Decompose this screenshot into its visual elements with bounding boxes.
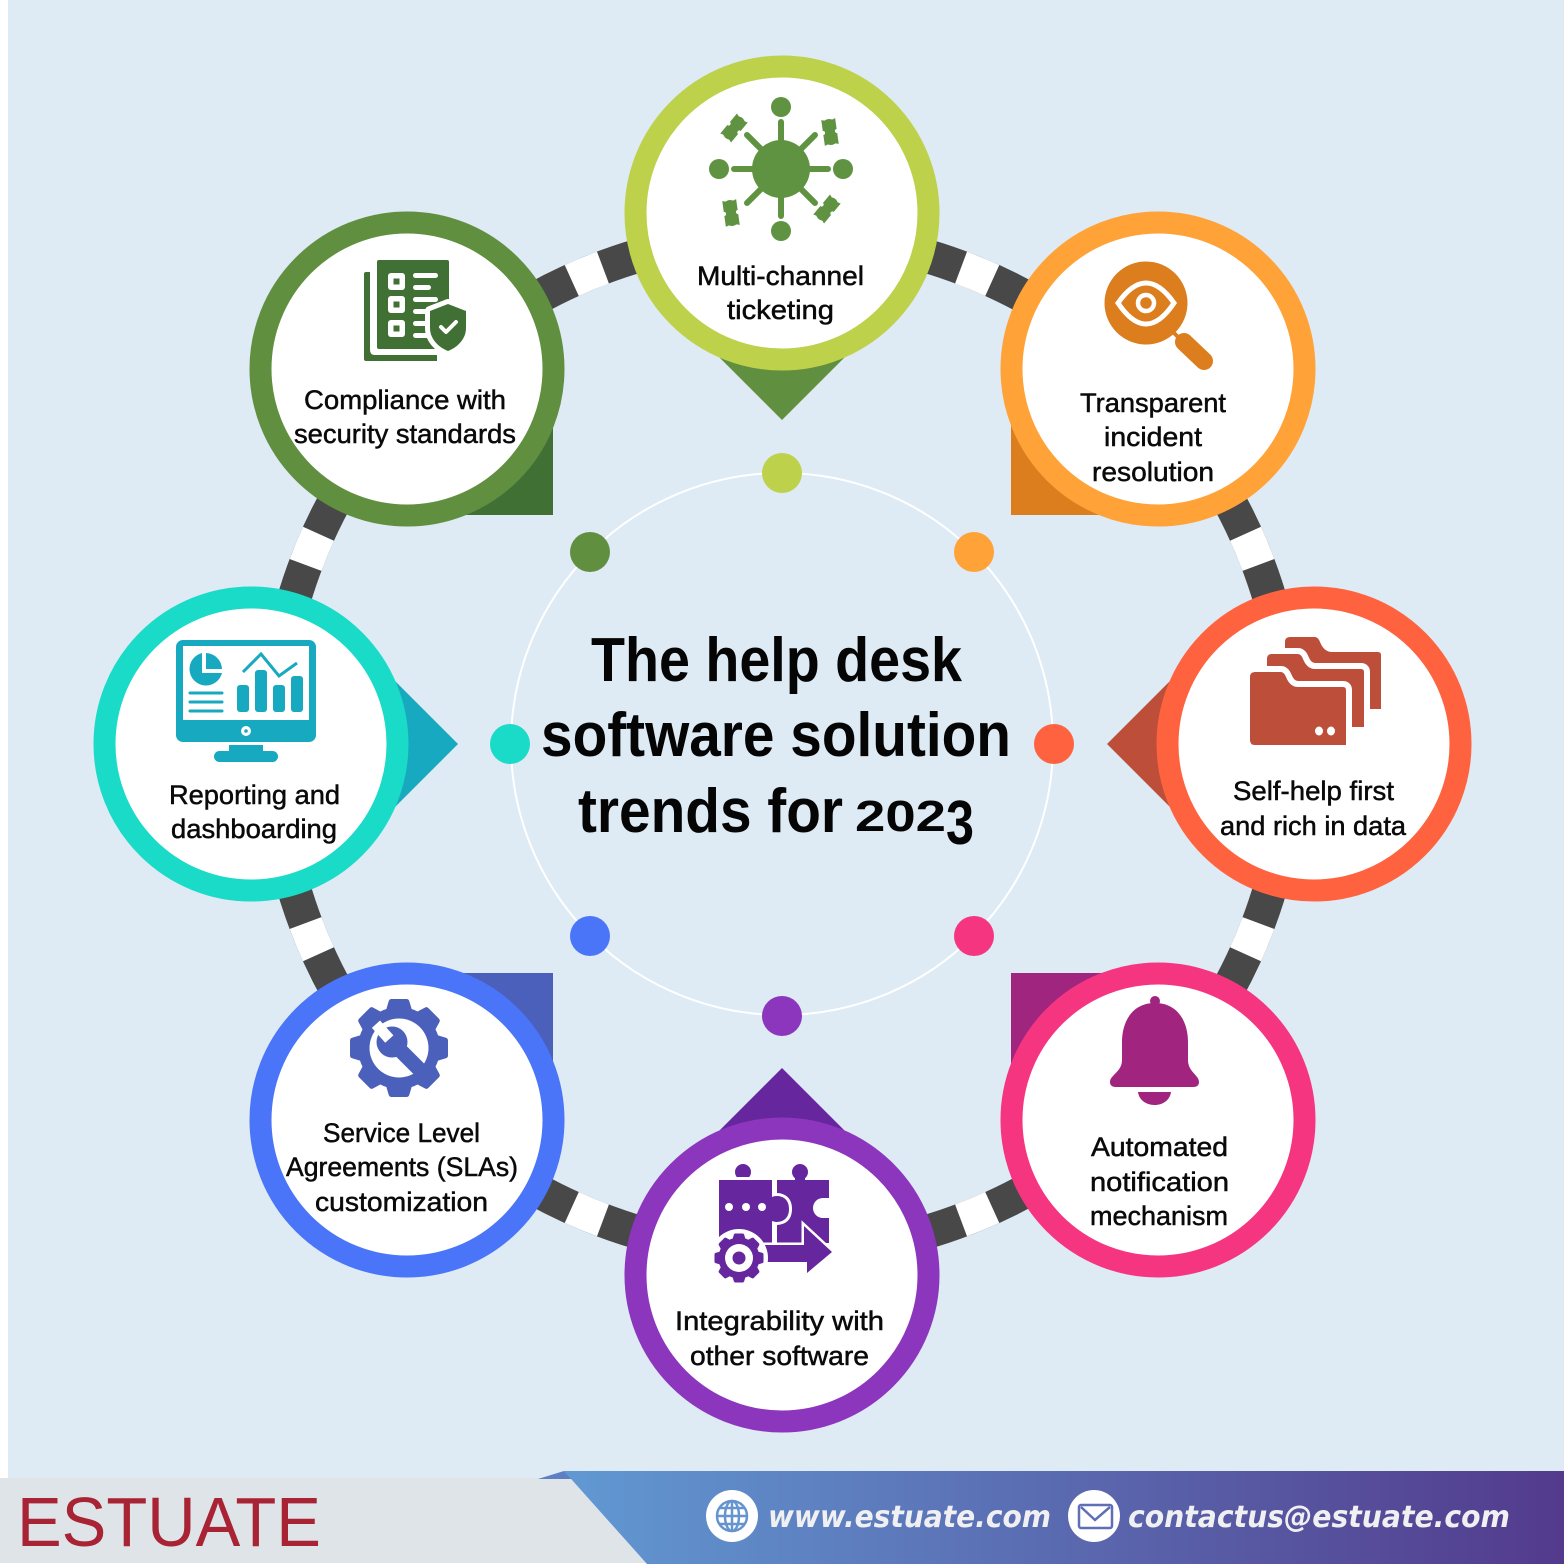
label: Service Level xyxy=(323,1118,480,1148)
panel: compliance with security standards xyxy=(260,222,554,516)
label xyxy=(1080,388,1226,487)
label xyxy=(169,780,340,844)
icon: bell xyxy=(1110,996,1199,1105)
title: 202 xyxy=(855,792,946,841)
title: trends for xyxy=(578,777,843,846)
label xyxy=(294,385,516,449)
label: mechanism xyxy=(1090,1201,1228,1231)
label: notification xyxy=(1090,1167,1229,1197)
label: Transparent xyxy=(1080,388,1226,418)
title xyxy=(541,626,1011,858)
label: incident xyxy=(1104,422,1203,452)
label: Agreements (SLAs) xyxy=(286,1152,518,1182)
icon: eye in magnifier xyxy=(1104,262,1204,361)
label: ticketing xyxy=(727,295,834,325)
label: Multi-channel xyxy=(697,261,864,291)
outer dashed connector ring xyxy=(273,235,1291,1253)
title: software solution xyxy=(541,701,1011,770)
title: The help desk xyxy=(591,626,962,695)
label: customization xyxy=(315,1187,488,1217)
label: dashboarding xyxy=(171,814,337,844)
label: Integrability with xyxy=(675,1306,884,1336)
label: and rich in data xyxy=(1220,811,1407,841)
label xyxy=(1220,776,1407,841)
label xyxy=(697,261,864,325)
label: other software xyxy=(690,1341,869,1371)
panel: reporting and dashboarding xyxy=(104,598,458,890)
panel: automated notification mechanism xyxy=(1011,973,1304,1266)
inner ring with coloured dots xyxy=(490,453,1074,1036)
label xyxy=(675,1306,884,1371)
icon: puzzle, gear and arrow xyxy=(710,1164,832,1287)
email: contactus@estuate.com xyxy=(1128,1500,1510,1535)
panel: service level agreements xyxy=(260,973,554,1266)
icon: monitor dashboard xyxy=(176,640,316,762)
panel: multi-channel ticketing xyxy=(636,66,928,420)
label: Compliance with xyxy=(304,385,506,415)
icon: ticket network xyxy=(709,97,853,241)
label: Reporting and xyxy=(169,780,340,810)
footer xyxy=(0,1471,1564,1564)
icon: globe xyxy=(706,1490,758,1542)
label: Automated xyxy=(1091,1132,1228,1162)
panel: self-help first xyxy=(1107,598,1460,890)
panel: transparent incident resolution xyxy=(1011,222,1304,516)
label: resolution xyxy=(1092,457,1214,487)
icon: gear and wrench xyxy=(353,1002,445,1094)
title: 3 xyxy=(946,789,974,858)
icon: envelope xyxy=(1068,1490,1120,1542)
label xyxy=(286,1118,518,1217)
label: Self-help first xyxy=(1233,776,1395,806)
label xyxy=(1090,1132,1229,1231)
panel: integrability with other software xyxy=(636,1068,928,1422)
website: www.estuate.com xyxy=(768,1500,1051,1535)
icon: checklist and shield xyxy=(364,260,466,361)
label: security standards xyxy=(294,419,516,449)
logo: ESTUATE: ESTUATE xyxy=(17,1483,321,1561)
icon: folders xyxy=(1250,637,1381,745)
